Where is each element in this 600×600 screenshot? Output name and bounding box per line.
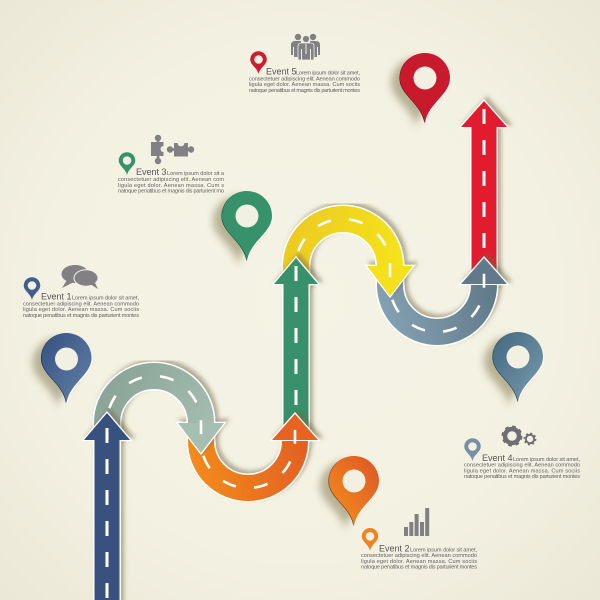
large pin: red (391, 53, 451, 128)
icon: small slate pin (464, 438, 481, 461)
road: yellow arc arrow (296, 219, 413, 296)
icon: bar chart (404, 508, 429, 536)
road: gray U arrow (390, 258, 507, 332)
event 1 text: ligula eget dolor. Aenean massa. Cum sociis (23, 307, 139, 313)
event 4 text (464, 453, 580, 480)
road: orange U arrow (201, 414, 318, 488)
large pin: blue (32, 333, 92, 408)
event 2 text: Lorem ipsum dolor sit amet, (410, 548, 477, 554)
event 2 text: ligula eget dolor. Aenean massa. Cum sociis (361, 559, 477, 565)
icon: gears (503, 427, 536, 445)
icon: small orange pin (362, 528, 378, 551)
road: sage arc arrow (107, 376, 224, 453)
event 1 text (23, 292, 139, 319)
event 2 text: Event 2 (379, 544, 410, 554)
event 5 text: natoque penatibus et magnis dis parturient montes (249, 88, 360, 94)
event 1 text: Event 1 (41, 292, 72, 302)
event 4 block (464, 427, 580, 480)
large pin: green (213, 191, 273, 266)
large pin: slate (484, 332, 544, 407)
road: green straight arrow (274, 258, 318, 440)
event 5 text: consectetuer adipiscing elit. Aenean commodo (249, 76, 360, 82)
event 4 text: natoque penatibus et magnis dis parturient montes (464, 474, 580, 480)
event 2 block (361, 508, 477, 571)
icon: small blue pin (24, 277, 40, 300)
event 4 text: ligula eget dolor. Aenean massa. Cum sociis (464, 468, 580, 474)
icon: small green pin (119, 152, 135, 175)
event 5 text (249, 66, 360, 94)
event 5 text: Lorem ipsum dolor sit amet, (296, 70, 360, 76)
event 5 text: Event 5 (266, 66, 297, 76)
event 1 text: Lorem ipsum dolor sit amet, (72, 296, 139, 302)
event 2 text (361, 544, 477, 571)
icon: people group (291, 34, 320, 60)
event 5 text: ligula eget dolor. Aenean massa. Cum sociis (249, 82, 360, 88)
event 2 text: natoque penatibus et magnis dis parturient montes (361, 565, 477, 571)
large pin: orange (320, 456, 380, 531)
event 4 text: Event 4 (482, 453, 513, 463)
event 3 text: consectetuer adipiscing elit. Aenean com (118, 177, 224, 183)
event 1 text: natoque penatibus et magnis dis parturient montes (23, 313, 139, 319)
event 4 text: consectetuer adipiscing elit. Aenean commodo (464, 463, 580, 469)
road: red straight arrow (461, 101, 507, 290)
event 2 text: consectetuer adipiscing elit. Aenean commodo (361, 553, 477, 559)
event 3 block (118, 135, 225, 194)
event 3 text: ligula eget dolor. Aenean massa. Cum s (118, 183, 224, 189)
event 3 text (118, 167, 225, 194)
icon: speech bubbles (62, 265, 98, 289)
icon: small red pin (250, 51, 267, 74)
event 3 text: natoque penatibus et magnis dis parturient mo (118, 188, 224, 194)
event 3 text: Event 3 (136, 167, 167, 177)
event 1 text: consectetuer adipiscing elit. Aenean commodo (23, 301, 139, 307)
event 3 text: Lorem ipsum dolor sit a (167, 171, 225, 177)
icon: puzzle pieces (151, 135, 194, 164)
event 1 block (23, 265, 139, 319)
event 4 text: Lorem ipsum dolor sit amet, (513, 457, 580, 463)
event 5 block (249, 34, 360, 94)
road: blue straight arrow (84, 413, 130, 600)
